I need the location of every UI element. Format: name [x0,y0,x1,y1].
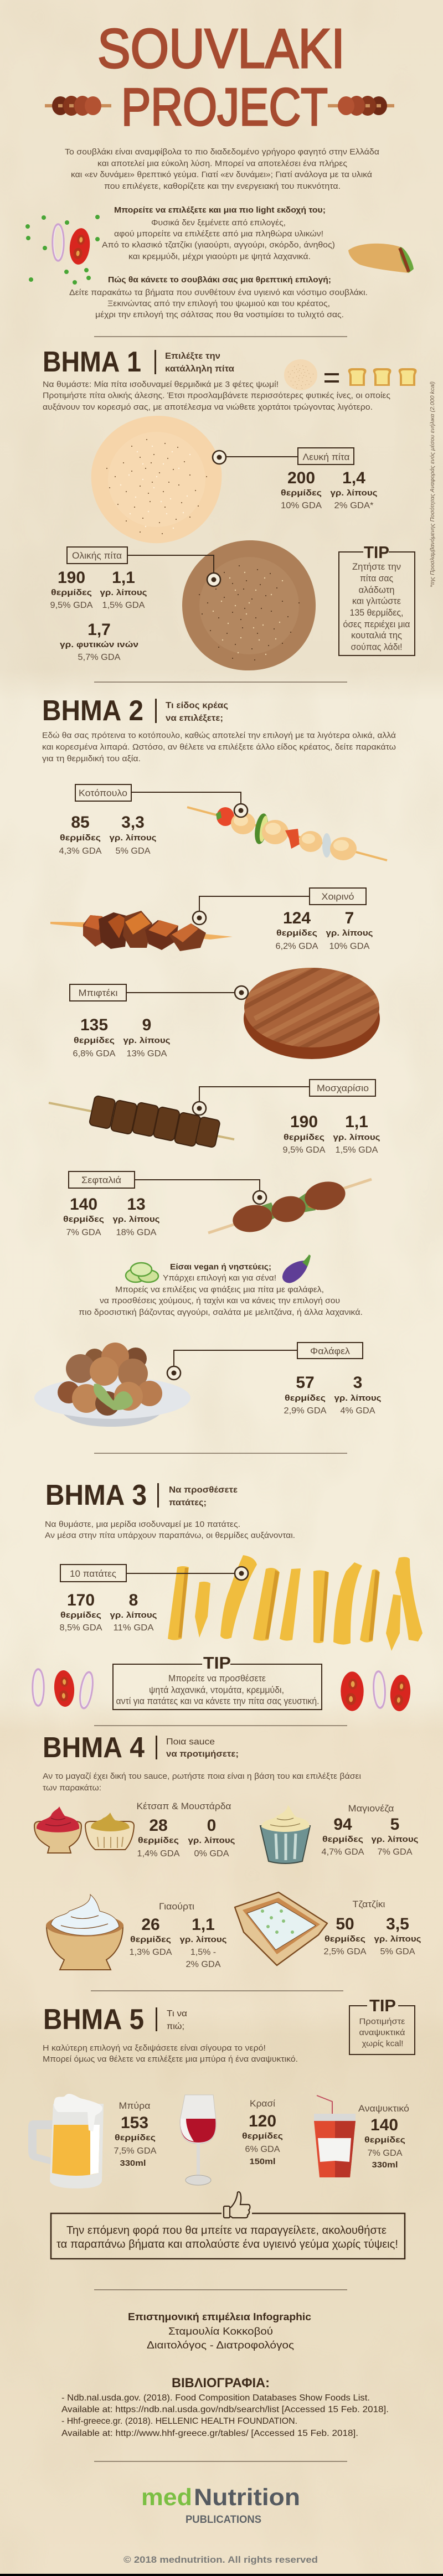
tip: oil-free pita: Ζητήστε την [352,561,401,572]
stats: whole wheat pita: γρ. λίπους [100,588,147,597]
heading: step 3 [45,1479,238,1511]
footnote: GDA reference: *της Προσλαμβανόμενης Ποσότητας Αναφοράς ενός μέσου ενήλικα (2.000 kcal) [429,381,436,587]
stats: beer: θερμίδες [115,2133,156,2143]
icon: pita equals three slices of bread [284,359,417,390]
stats: fries [60,1591,157,1633]
callout: chicken label: Κοτόπουλο [79,788,127,798]
icon: cucumber [126,1263,158,1282]
stats: falafel: 2,9% GDA [284,1406,327,1416]
tip: oil-free pita: κουταλιά της [351,630,402,641]
stats: falafel [284,1374,382,1416]
stats: seftalia [63,1195,160,1237]
divider [94,1453,347,1454]
stats: burger patty: 9 [142,1016,151,1034]
tip: oil-free pita: πίτα σας [360,573,393,584]
icon: white pita [91,416,222,543]
stats: soft drink: 330ml [372,2160,398,2170]
heading: step 3: Να προσθέσετε [169,1485,238,1495]
stats: burger patty: θερμίδες [74,1036,115,1045]
heading: step 2 [42,695,228,727]
callout: seftalia label [69,1171,266,1204]
stats: chicken: 85 [71,813,90,832]
stats: seftalia: 140 [70,1195,97,1214]
stats: burger patty: 6,8% GDA [73,1049,116,1059]
tzatziki stats: 3,5 [386,1915,409,1933]
heading: step 5: πιώ; [167,2022,184,2031]
callout: closing message: τα παραπάνω βήματα και απολαύστε ένα υγιεινό γεύμα χωρίς τύψεις! [56,2238,398,2250]
stats: falafel: 4% GDA [340,1406,375,1416]
bibliography: - Ndb.nal.usda.gov. (2018). Food Composition Databases Show Foods List. [61,2393,370,2403]
icon: burger patty [244,968,380,1059]
yogurt stats: γρ. λίπους [179,1935,227,1944]
icon: onions and tomatoes right [341,1671,412,1712]
tzatziki stats [323,1899,421,1956]
callout: whole wheat pita label [67,547,220,586]
stats: beer: 330ml [120,2159,146,2168]
stats: beef: γρ. λίπους [333,1133,380,1142]
stats: wine: 150ml [249,2157,276,2166]
callout: burger patty label: Μπιφτέκι [79,988,118,998]
step 1 text: Να θυμάστε: Μία πίτα ισοδυναμεί θερμιδικά με 3 φέτες ψωμί! [43,380,279,389]
light version text: και κρεμμύδι, μέχρι γιαούρτι με ψητά λαχανικά. [128,252,311,261]
tzatziki stats: γρ. λίπους [374,1934,421,1944]
scientific editor credit [128,2311,311,2351]
icon: ten fries [168,1555,423,1651]
step 2 text: Εδώ θα σας πρότεινα το κοτόπουλο, καθώς αποτελεί την επιλογή με τα λιγότερα ολικά, αλλά [42,731,396,740]
step 4 text: Αν το μαγαζί έχει δική του sauce, ρωτήστε ποια είναι η βάση του και επιλέξτε βάσει [43,1772,361,1781]
heading: step 5: Τι να [167,2009,187,2019]
bibliography: Available at: http://www.hhf-greece.gr/tables/ [Accessed 15 Feb. 2018]. [61,2429,358,2438]
vegan text: πιο δροσιστική βάζοντας αγγούρι, σαλάτα με μελιτζάνα, ή άλλα λαχανικά. [79,1308,363,1317]
copyright: © 2018 mednutrition. All rights reserved [123,2554,318,2565]
stats: pork: 6,2% GDA [276,942,318,951]
tip: vegetables instead of fries: Μπορείτε να προσθέσετε [168,1673,266,1684]
heading: step 1: Επιλέξτε την [165,352,220,361]
stats: seftalia: 18% GDA [116,1228,157,1237]
divider [91,1990,343,1991]
mayonnaise stats: 4,7% GDA [321,1847,364,1857]
stats: beer [114,2100,157,2168]
icon: eggplant [282,1255,311,1283]
stats: seftalia: 7% GDA [66,1228,101,1237]
callout: beef label: Μοσχαρίσιο [317,1083,369,1093]
tip: oil-free pita: αλάδωτη [359,585,394,595]
heading: step 3: πατάτες; [169,1498,207,1508]
logo: medNutrition publications: Nutrition [194,2484,300,2511]
yogurt stats: 26 [141,1916,160,1934]
step 3 text: Να θυμάστε, μια μερίδα ισοδυναμεί με 10 πατάτες. [45,1520,240,1529]
bibliography [61,2376,389,2438]
mayonnaise stats: 94 [333,1815,352,1834]
icon: yogurt bowl [46,1894,123,1970]
stats: chicken: 3,3 [121,813,145,832]
stats: wine [242,2098,283,2166]
stats: white pita: 1,4 [342,469,365,487]
tzatziki stats: 2,5% GDA [323,1947,367,1956]
icon: falafel plate [34,1343,190,1427]
mayonnaise stats: Μαγιονέζα [348,1803,394,1814]
yogurt stats: 1,5% - [190,1948,216,1957]
stats: fries: γρ. λίπους [110,1610,157,1620]
stats: soft drink [358,2103,409,2170]
stats: white pita [281,469,378,510]
callout: white pita label: Λευκή πίτα [302,452,350,462]
callout: burger patty label [70,984,248,1001]
icon: onion, tomato and herbs [28,217,97,282]
stats: beer: 153 [121,2114,148,2132]
stats: white pita: θερμίδες [281,488,322,498]
step 3 text [45,1520,295,1540]
icon: mustard cup [85,1813,134,1850]
panel: step 4 [34,1732,421,1970]
intro text [65,147,379,191]
stats: soft drink: θερμίδες [364,2135,405,2145]
bibliography: Available at: https://ndb.nal.usda.gov/ndb/search/list [Accessed 15 Feb. 2018]. [61,2405,389,2414]
stats: chicken: 5% GDA [115,846,151,856]
callout: pork label: Χοιρινό [321,891,354,902]
callout: ten fries label [60,1565,248,1582]
stats: chicken [59,813,157,856]
nutritious option text: Πώς θα κάνετε το σουβλάκι σας μια θρεπτική επιλογή; [108,275,331,285]
icon: beef skewer [49,1096,234,1148]
heading: step 4: Ποια sauce [166,1737,215,1747]
nutritious option text [69,275,368,319]
vegan text: να προσθέσεις χούμους, ή ταχίνι και να κάνεις την επιλογή σου [100,1296,340,1305]
stats: white pita: 2% GDA* [334,501,373,510]
mayonnaise stats: 7% GDA [378,1847,413,1857]
heading: step 2: Τι είδος κρέας [166,701,228,710]
stats: whole wheat pita: 9,5% GDA [50,601,93,610]
light version text: Φυσικά δεν ξεμένετε από επιλογές, [151,218,286,228]
tip: zero-calorie soft drinks: αναψυκτικά [359,2028,405,2037]
stats: white pita: γρ. λίπους [330,488,378,498]
stats: pork: θερμίδες [276,928,317,938]
stats: falafel: θερμίδες [285,1393,326,1403]
stats: beef: θερμίδες [284,1133,324,1142]
step 3 text: Αν μέσα στην πίτα υπάρχουν παραπάνω, οι θερμίδες αυξάνονται. [45,1531,295,1540]
stats: pork: 7 [345,909,354,927]
stats: beef: 1,1 [345,1113,368,1131]
tip: vegetables instead of fries: ψητά λαχανικά, ντομάτα, κρεμμύδι, [149,1685,284,1695]
stats: burger patty: 135 [80,1016,108,1034]
callout: falafel label [167,1343,363,1380]
light version text [102,205,335,261]
icon: chicken skewer [187,807,387,860]
yogurt stats: 1,3% GDA [130,1948,172,1957]
step 1 text: αυξάνουν τον κορεσμό σας, με αποτέλεσμα να νιώθετε χορτάτοι τρώγοντας λιγότερο. [43,402,373,412]
tip: oil-free pita: TIP [364,543,389,562]
stats: fries: 8 [129,1591,138,1609]
step 2 text: για τη θερμιδική του αξία. [42,754,141,763]
yogurt stats: 2% GDA [186,1960,221,1969]
stats: whole wheat pita [50,569,147,662]
tip: oil-free pita: σούπας λάδι! [351,642,402,652]
panel: step 3 [33,1479,423,1712]
scientific editor credit: Επιστημονική επιμέλεια Infographic [128,2311,311,2322]
scientific editor credit: Σταμουλία Κοκκοβού [168,2326,273,2337]
tip: vegetables instead of fries: TIP [203,1653,231,1672]
step 5 text: Η καλύτερη επιλογή να ξεδιψάσετε είναι σίγουρα το νερό! [43,2043,266,2053]
tzatziki stats: θερμίδες [324,1934,365,1944]
divider [94,336,347,337]
scientific editor credit: Διαιτολόγος - Διατροφολόγος [147,2340,294,2351]
icon: seftalia skewer [208,1178,372,1235]
tzatziki stats: 5% GDA [380,1947,415,1956]
stats: fries: 8,5% GDA [60,1623,102,1633]
heading: step 1: ΒΗΜΑ 1 [43,346,141,378]
tip: oil-free pita: 135 θερμίδες, [350,607,403,618]
yogurt stats: 1,1 [192,1916,215,1934]
step 2 text [42,731,396,763]
heading: step 4: ΒΗΜΑ 4 [43,1732,145,1764]
step 1 text [43,380,390,412]
step 2 text: και κορεσμένα λιπαρά. Ωστόσο, αν θέλετε να επιλέξετε άλλο είδος κρέατος, δείτε παρακάτω [42,742,396,752]
callout: whole wheat pita label: Ολικής πίτα [72,550,122,561]
tip: zero-calorie soft drinks: Προτιμήστε [359,2017,405,2026]
callout: closing message: Την επόμενη φορά που θα μπείτε να παραγγείλετε, ακολουθήστε [66,2224,387,2237]
icon: tzatziki tub [235,1892,327,1965]
stats: wine: Κρασί [250,2098,275,2109]
stats: soft drink: Αναψυκτικό [358,2103,409,2114]
title [97,18,345,137]
tip: oil-free pita: και γλιτώστε [352,596,401,606]
stats: whole wheat pita: 190 [58,569,85,587]
callout: falafel label: Φαλάφελ [310,1346,351,1356]
yogurt stats: Γιαούρτι [159,1901,194,1912]
stats: beer: Μπύρα [119,2100,151,2111]
stats: beef: 190 [290,1113,318,1131]
heading: step 1 [43,346,234,378]
stats: seftalia: θερμίδες [63,1215,104,1224]
stats: pork: γρ. λίπους [326,928,373,938]
ketchup and mustard stats: 0 [207,1816,216,1835]
mayonnaise stats: 5 [390,1815,399,1834]
heading: step 4 [43,1732,239,1764]
callout: closing message [51,2213,405,2259]
stats: whole wheat pita: 1,7 [87,621,111,639]
stats: fries: 170 [67,1591,95,1609]
vegan text: Είσαι vegan ή νηστεύεις; [170,1262,271,1272]
tzatziki stats: 50 [336,1915,354,1933]
stats: burger patty [73,1016,171,1059]
vegan text: Μπορείς να επιλέξεις να φτιάξεις μια πίτα με φαλάφελ, [115,1285,324,1294]
icon: ketchup cup [34,1806,81,1853]
nutritious option text: Ξεκινώντας από την επιλογή του ψωμιού και του κρέατος, [107,299,330,308]
logo: medNutrition publications: PUBLICATIONS [186,2514,261,2526]
ketchup and mustard stats: 28 [149,1816,168,1835]
ketchup and mustard stats: Κέτσαπ & Μουστάρδα [136,1801,231,1811]
heading: step 3: ΒΗΜΑ 3 [45,1479,147,1511]
tip: zero-calorie soft drinks: TIP [369,1996,396,2015]
panel: step 1 [43,346,417,670]
stats: pork [276,909,373,951]
tzatziki stats: Τζατζίκι [352,1899,385,1909]
mayonnaise stats [321,1803,419,1857]
icon: right skewer [328,96,394,116]
tip: vegetables instead of fries: αντί για πατάτες και να κάνετε την πίτα σας γευστική. [116,1696,319,1706]
ketchup and mustard stats: γρ. λίπους [188,1836,235,1845]
stats: chicken: θερμίδες [60,833,101,843]
stats: chicken: γρ. λίπους [110,833,157,843]
icon: soft drink cup [314,2095,356,2177]
stats: falafel: 3 [353,1374,362,1392]
vegan text: Υπάρχει επιλογή και για σένα! [163,1273,276,1283]
stats: wine: 6% GDA [245,2145,280,2154]
divider [94,682,347,683]
divider [94,1725,347,1726]
title: SOUVLAKI [97,18,345,80]
intro text: που επιλέγετε, καθορίζετε και την ενεργειακή του πυκνότητα. [104,182,341,191]
yogurt stats [130,1901,227,1969]
logo: medNutrition publications [141,2484,300,2526]
icon: whole wheat pita [182,540,316,670]
step 5 text [43,2043,298,2064]
ketchup and mustard stats: θερμίδες [138,1836,179,1845]
icon: wrapped pita [348,244,414,273]
intro text: και αποτελεί μια εύκολη λύση. Μπορεί να αποτελέσει ένα πλήρες [97,159,347,168]
stats: whole wheat pita: 1,1 [112,569,135,587]
stats: chicken: 4,3% GDA [59,846,102,856]
heading: step 1: κατάλληλη πίτα [165,364,234,374]
mayonnaise stats: γρ. λίπους [371,1835,419,1844]
icon: left skewer [45,96,111,116]
stats: pork: 124 [283,909,311,927]
callout: beef label [193,1080,375,1115]
callout: chicken label [75,784,248,817]
stats: beef: 1,5% GDA [336,1145,378,1155]
divider [94,2461,347,2462]
panel: step 2 [34,695,396,1427]
tip: zero-calorie soft drinks: χωρίς kcal! [362,2039,403,2048]
callout: seftalia label: Σεφταλιά [81,1175,121,1185]
ketchup and mustard stats: 0% GDA [194,1849,229,1859]
panel: step 5 [28,1996,415,2259]
stats: fries: 11% GDA [113,1623,154,1633]
icon: thumbs up [224,2192,250,2218]
step 4 text: των παρακάτω: [43,1783,101,1793]
intro text: και «εν δυνάμει» θρεπτικό γεύμα. Γιατί «εν δυνάμει»; Γιατί ανάλογα με τα υλικά [71,170,372,179]
stats: white pita: 10% GDA [281,501,322,510]
stats: falafel: γρ. λίπους [334,1393,382,1403]
icon: onions and tomatoes left [33,1669,95,1709]
heading: step 4: να προτιμήσετε; [166,1749,239,1759]
step 1 text: Προτιμήστε πίτα ολικής άλεσης. Έτσι προσλαμβάνετε περισσότερες φυτικές ίνες, οι οποίες [43,391,390,400]
stats: whole wheat pita: 5,7% GDA [78,653,121,662]
stats: burger patty: 13% GDA [126,1049,167,1059]
light version text: Μπορείτε να επιλέξετε και μια πιο light εκδοχή του; [114,205,326,215]
stats: whole wheat pita: 1,5% GDA [102,601,145,610]
stats: soft drink: 140 [370,2116,398,2134]
step 4 text [43,1772,361,1793]
stats: wine: θερμίδες [242,2131,283,2141]
stats: seftalia: 13 [127,1195,146,1214]
bibliography: ΒΙΒΛΙΟΓΡΑΦΙΑ: [172,2376,270,2391]
tip: vegetables instead of fries [113,1653,322,1710]
title: PROJECT [121,78,328,137]
callout: white pita label [213,448,354,464]
callout: pork label [193,888,366,925]
stats: wine: 120 [249,2112,276,2130]
stats: white pita: 200 [287,469,315,487]
heading: step 5: ΒΗΜΑ 5 [43,2004,144,2036]
intro text: Το σουβλάκι είναι αναμφίβολα το πιο διαδεδομένο γρήγορο φαγητό στην Ελλάδα [65,147,379,157]
vegan text [79,1262,363,1317]
icon: beer mug [28,2094,104,2188]
divider [94,2289,347,2290]
ketchup and mustard stats: 1,4% GDA [137,1849,180,1859]
stats: whole wheat pita: θερμίδες [51,588,92,597]
logo: medNutrition publications: med [141,2484,192,2511]
stats: falafel: 57 [296,1374,315,1392]
stats: burger patty: γρ. λίπους [123,1036,171,1045]
nutritious option text: Δείτε παρακάτω τα βήματα που συνθέτουν ένα υγιεινό και νόστιμο σουβλάκι. [69,288,368,297]
icon: wine glass [180,2095,216,2185]
light version text: αφού μπορείτε να επιλέξετε από μια πληθώρα υλικών! [114,229,323,239]
bibliography: - Hhf-greece.gr. (2018). HELLENIC HEALTH FOUNDATION. [61,2417,297,2426]
stats: whole wheat pita: γρ. φυτικών ινών [60,640,138,649]
stats: soft drink: 7% GDA [368,2149,403,2158]
light version text: Από το κλασικό τζατζίκι (γιαούρτι, αγγούρι, σκόρδο, άνηθος) [102,240,335,250]
mayonnaise stats: θερμίδες [322,1835,363,1844]
heading: step 2: ΒΗΜΑ 2 [42,695,143,727]
stats: beef [282,1113,380,1155]
nutritious option text: μέχρι την επιλογή της σάλτσας που θα νοστιμίσει το τυλιχτό σας. [95,310,344,319]
step 5 text: Μπορεί όμως να θέλετε να επιλέξετε μια μπύρα ή ένα αναψυκτικό. [43,2054,298,2064]
tip: oil-free pita [339,543,415,655]
stats: fries: θερμίδες [60,1610,101,1620]
icon: mayonnaise glass [260,1805,310,1863]
callout: ten fries label: 10 πατάτες [70,1568,116,1579]
stats: seftalia: γρ. λίπους [113,1215,160,1224]
stats: pork: 10% GDA [329,942,370,951]
tip: oil-free pita: όσες περιέχει μια [343,619,410,629]
ketchup and mustard stats [136,1801,235,1859]
stats: beer: 7,5% GDA [114,2146,157,2156]
yogurt stats: θερμίδες [130,1935,171,1944]
icon: pork skewer [50,911,233,951]
tip: zero-calorie soft drinks [349,1996,415,2054]
heading: step 2: να επιλέξετε; [166,714,223,723]
stats: beef: 9,5% GDA [282,1145,326,1155]
